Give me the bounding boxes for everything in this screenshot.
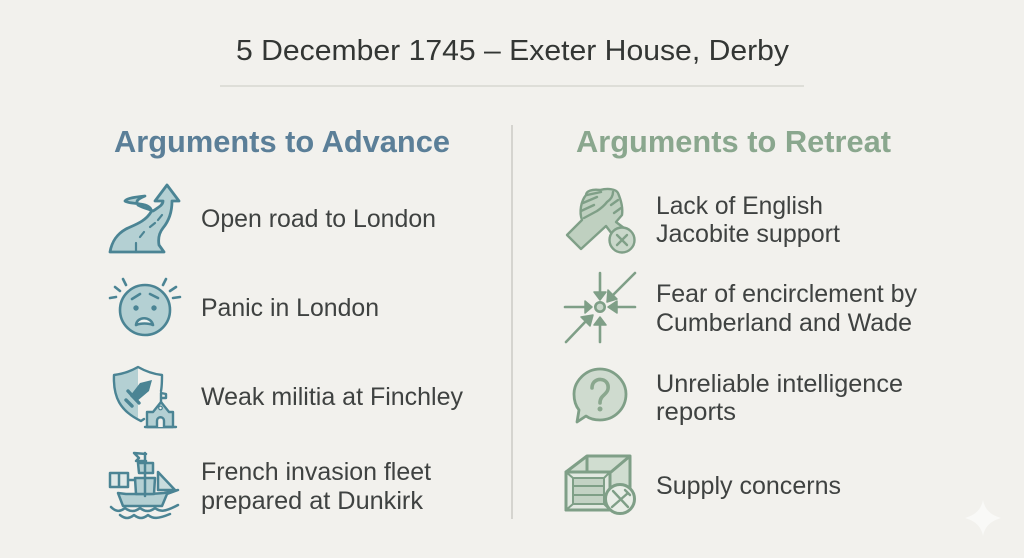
- panel: arguments to retreat: [565, 124, 917, 514]
- panel: arguments to advance: [110, 124, 463, 518]
- icon: winding road with arrow: [110, 185, 179, 252]
- text: open road to London: Open road to London: [201, 205, 436, 233]
- text: weak militia at Finchley: Weak militia at Finchley: [201, 383, 463, 411]
- text: fear of encirclement: Fear of encirclement by: [656, 280, 917, 308]
- text: French invasion fleet prepared at Dunkirk: French invasion fleet: [201, 458, 431, 486]
- title: 5 December 1745 – Exeter House, Derby: [236, 35, 790, 67]
- text: lack of English Jacobite support: Jacobite support: [656, 220, 840, 248]
- icon: shield, sword and building: [114, 367, 176, 427]
- text: lack of English Jacobite support: Lack of English: [656, 192, 823, 220]
- heading: arguments to retreat: Arguments to Retreat: [576, 124, 891, 159]
- text: fear of encirclement: Cumberland and Wade: [656, 309, 912, 337]
- text: panic in London: Panic in London: [201, 294, 379, 322]
- text: unreliable intelligence reports: Unreliable intelligence: [656, 370, 903, 398]
- text: unreliable intelligence reports: reports: [656, 398, 736, 426]
- heading: arguments to advance: Arguments to Advance: [114, 124, 450, 159]
- icon: sailing ship: [110, 453, 178, 518]
- icon: supply crate with fork and knife: [566, 456, 634, 514]
- icon: question speech bubble: [574, 369, 626, 422]
- icon: clasped hands with cross: [567, 189, 634, 252]
- text: supply concerns: Supply concerns: [656, 472, 841, 500]
- icon: panicked face: [110, 279, 180, 335]
- text: French invasion fleet prepared at Dunkirk: prepared at Dunkirk: [201, 487, 423, 515]
- icon: converging arrows: [565, 273, 635, 342]
- icon: sparkle watermark: [965, 500, 1001, 536]
